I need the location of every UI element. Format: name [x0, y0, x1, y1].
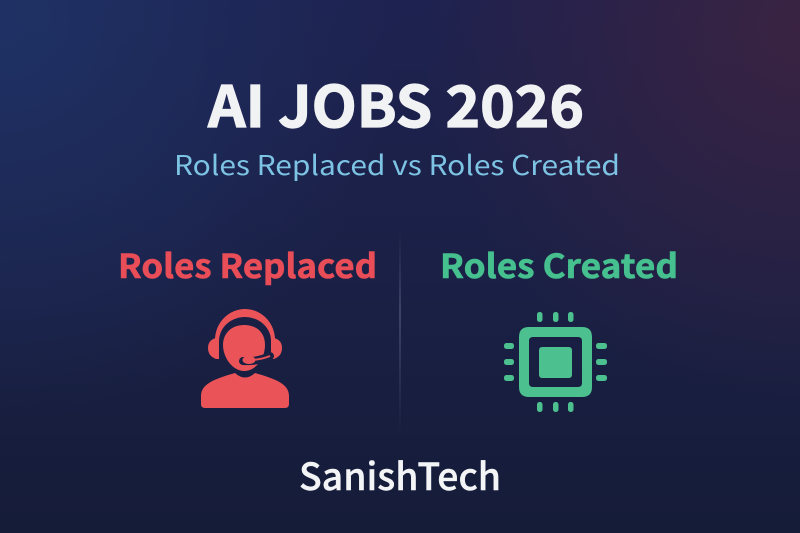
heading: roles replaced: Roles Replaced [118, 240, 377, 288]
icon: microchip [504, 312, 607, 412]
brand name: SanishTech [299, 447, 501, 501]
subtitle: Roles Replaced vs Roles Created [174, 144, 620, 183]
heading: roles created: Roles Created [440, 240, 678, 288]
icon: support agent with headset [201, 309, 289, 408]
title: AI JOBS 2026 [207, 62, 584, 144]
